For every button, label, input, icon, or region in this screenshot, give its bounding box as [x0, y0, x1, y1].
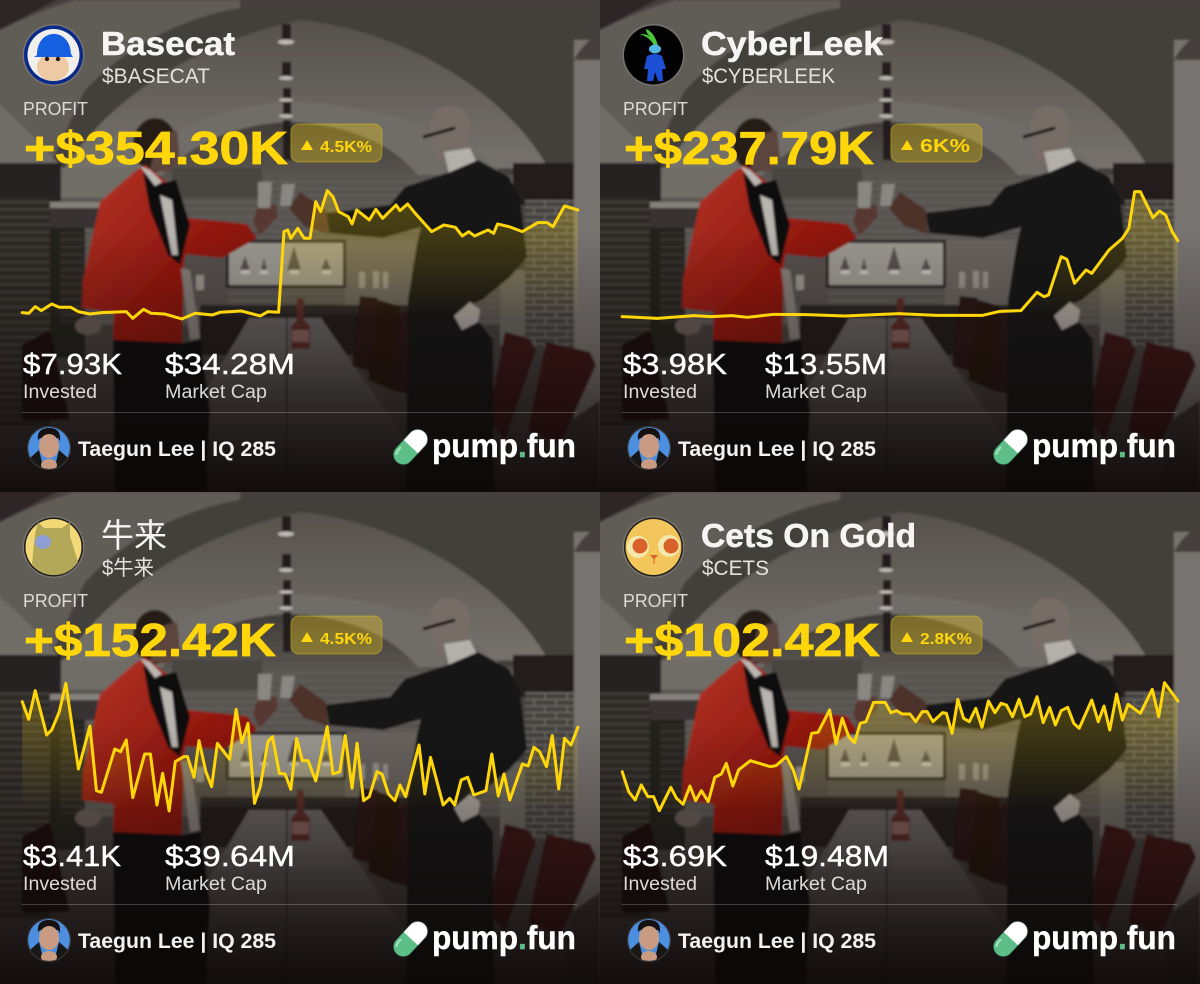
author [28, 918, 276, 963]
icon: 牛来 avatar [22, 516, 84, 578]
icon: Basecat avatar [22, 24, 84, 86]
stat: invested: $3.41K [23, 841, 122, 873]
icon: CyberLeek avatar [622, 24, 684, 86]
profit value: +$102.42K [624, 614, 880, 666]
profit value: +$237.79K [624, 122, 874, 174]
stat: invested [623, 841, 728, 895]
panel: Basecat [0, 0, 610, 502]
pump.fun logo: pump.fun [1032, 427, 1176, 464]
stat: market cap: Market Cap [765, 382, 867, 403]
profit label: PROFIT [23, 99, 88, 119]
stat: market cap: Market Cap [165, 874, 267, 895]
profit value: +$152.42K [24, 614, 276, 666]
author [628, 426, 876, 471]
ticker: $CYBERLEEK [702, 65, 835, 88]
author [28, 426, 276, 471]
panel: 牛来 [0, 482, 610, 984]
author: Taegun Lee | IQ 285 [678, 930, 876, 953]
badge: gain percent [891, 124, 982, 162]
stat: invested: $7.93K [23, 349, 123, 381]
stat: invested: $3.69K [623, 841, 728, 873]
stat: invested [23, 352, 122, 398]
author: Taegun Lee | IQ 285 [78, 930, 276, 953]
profit label: PROFIT [23, 591, 88, 611]
stat: invested: Invested [23, 874, 97, 895]
badge: gain percent: 6K% [920, 136, 970, 156]
stat: invested: Invested [623, 874, 697, 895]
price chart: CyberLeek [622, 192, 1178, 318]
price chart: Basecat [22, 191, 578, 319]
author: Taegun Lee | IQ 285 [78, 438, 276, 461]
stat: market cap: $39.64M [165, 841, 295, 873]
panel: CyberLeek [590, 0, 1200, 502]
token name: Cets On Gold [701, 517, 916, 554]
stat: market cap: Market Cap [765, 874, 867, 895]
ticker: $BASECAT [102, 65, 210, 88]
stat: invested [23, 844, 121, 890]
pump.fun logo: pump.fun [432, 919, 576, 956]
icon: Cets On Gold avatar [622, 516, 684, 578]
pump.fun logo [989, 917, 1176, 961]
stat: market cap [765, 841, 889, 895]
price chart: 牛来 [22, 683, 578, 811]
stat: market cap: $19.48M [765, 841, 889, 873]
pump.fun logo: pump.fun [1032, 919, 1176, 956]
pump.fun logo: pump.fun [432, 427, 576, 464]
stat: invested: Invested [23, 382, 97, 403]
stat: invested: Invested [623, 382, 697, 403]
profit label: PROFIT [623, 99, 688, 119]
stat: market cap [165, 841, 295, 895]
stat: invested: $3.98K [623, 349, 728, 381]
token name: CyberLeek [701, 25, 884, 62]
badge: gain percent: 4.5K% [320, 631, 372, 648]
ticker: $牛来 [102, 557, 154, 580]
token name: Basecat [101, 25, 235, 62]
token name: 牛来 [101, 517, 167, 554]
badge: gain percent: 4.5K% [320, 139, 372, 156]
stat: market cap [765, 349, 887, 403]
ticker: $CETS [702, 557, 769, 580]
badge: gain percent: 2.8K% [920, 631, 972, 648]
author: Taegun Lee | IQ 285 [678, 438, 876, 461]
price chart: Cets On Gold [622, 683, 1178, 811]
stat: invested [623, 352, 728, 398]
panel: Cets On Gold [590, 482, 1200, 984]
stat: market cap: Market Cap [165, 382, 267, 403]
profit value: +$354.30K [24, 122, 288, 174]
stat: market cap: $13.55M [765, 349, 887, 381]
badge: gain percent [291, 124, 382, 162]
stat: market cap: $34.28M [165, 349, 295, 381]
badge: gain percent [891, 616, 982, 654]
badge: gain percent [291, 616, 382, 654]
profit label: PROFIT [623, 591, 688, 611]
stat: market cap [165, 349, 295, 403]
author [628, 918, 876, 963]
